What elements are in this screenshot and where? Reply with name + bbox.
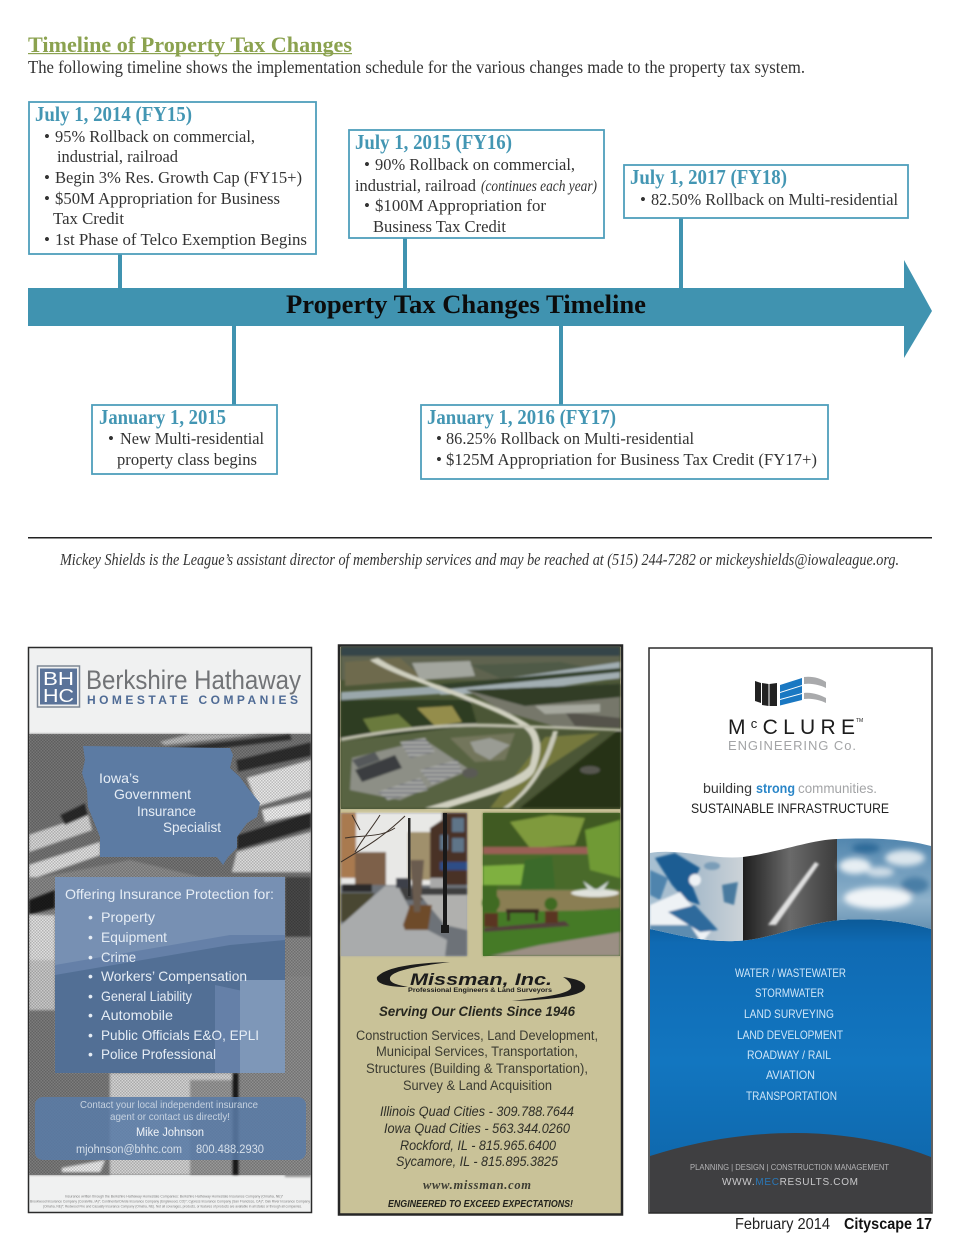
list: January 2016 changes: 86.25% Rollback on Multi-residential [446, 429, 694, 448]
coverage panel: Workers’ Compensation [101, 968, 247, 984]
coverage panel: • [88, 909, 93, 925]
service list: STORMWATER [755, 986, 824, 1000]
tagline: Specialist [163, 819, 221, 835]
office phone numbers [380, 1104, 574, 1169]
logo: Missman [377, 962, 585, 1001]
logo: Missman: Missman, Inc. [410, 971, 552, 989]
coverage panel: • [88, 949, 93, 965]
tagline [703, 780, 877, 796]
list: January 2015 changes: New Multi-residential [120, 429, 264, 448]
contact panel: Mike Johnson [136, 1127, 204, 1139]
list: July 2015 changes: • [364, 155, 370, 174]
service list: LAND SURVEYING [744, 1007, 834, 1021]
page footer [735, 1216, 932, 1233]
title: Timeline of Property Tax Changes [28, 32, 352, 57]
coverage panel: • [88, 988, 93, 1004]
list: July 2015 changes: industrial, railroad [355, 176, 476, 195]
company subtitle: HOMESTATE COMPANIES [87, 693, 298, 707]
list: July 2014 changes [44, 127, 307, 249]
service list: LAND DEVELOPMENT [737, 1028, 844, 1042]
list: January 2016 changes: • [436, 429, 442, 448]
tagline: communities. [798, 780, 877, 796]
slogan: Serving Our Clients Since 1946 [379, 1003, 575, 1019]
photo: downtown streetscape [341, 813, 467, 956]
service list: AVIATION [766, 1068, 815, 1082]
services: Structures (Building & Transportation), [366, 1061, 588, 1076]
photo: park with fountain [482, 813, 620, 956]
list: January 2016 changes: $125M Appropriation for Business Tax Credit (FY17+) [446, 450, 817, 469]
service list [735, 966, 846, 1103]
logo: BH HC: BH [43, 669, 74, 689]
list: July 2015 changes: 90% Rollback on commercial, [375, 155, 575, 174]
list: July 2014 changes: Begin 3% Res. Growth Cap (FY15+) [55, 168, 302, 187]
arrow label: Property Tax Changes Timeline [286, 290, 646, 319]
service list: TRANSPORTATION [746, 1089, 837, 1103]
tagline: Iowa’s [99, 770, 139, 786]
contact panel: mjohnson@bhhc.com [76, 1144, 182, 1156]
panel: January 1, 2016 [421, 405, 828, 479]
legal small print [30, 1194, 310, 1208]
coverage panel: General Liability [101, 988, 192, 1004]
heading: July 2014: July 1, 2014 (FY15) [35, 102, 192, 126]
panel: January 1, 2015 [92, 405, 277, 474]
ad: Missman, Inc. [339, 646, 622, 1214]
office phone numbers: Illinois Quad Cities - 309.788.7644 [380, 1104, 574, 1119]
coverage panel: • [88, 929, 93, 945]
list: January 2015 changes: • [108, 429, 114, 448]
service list: WATER / WASTEWATER [735, 966, 846, 980]
coverage panel: • [88, 1007, 93, 1023]
logo: Missman: Professional Engineers & Land Surveyors [408, 987, 552, 994]
services [356, 1028, 598, 1093]
coverage panel: Automobile [101, 1007, 173, 1023]
list: July 2015 changes: • [364, 196, 370, 215]
tagline: building [703, 780, 752, 796]
services: Construction Services, Land Development, [356, 1028, 598, 1043]
coverage panel: • [88, 1046, 93, 1062]
list: July 2014 changes: 1st Phase of Telco Exemption Begins [55, 230, 307, 249]
photo: aerial highway interchange [341, 647, 621, 809]
halftone photograph [29, 734, 311, 1177]
Iowa map shape [82, 746, 260, 865]
list: July 2015 changes: Business Tax Credit [373, 217, 506, 236]
page footer: Cityscape 17 [844, 1216, 932, 1233]
services: Municipal Services, Transportation, [376, 1044, 578, 1059]
page footer: February 2014 [735, 1216, 830, 1233]
tagline: strong [756, 780, 795, 796]
trademark: TM [856, 718, 863, 724]
tagline [99, 770, 221, 835]
coverage panel: Public Officials E&O, EPLI [101, 1027, 259, 1043]
heading: January 2015: January 1, 2015 [99, 405, 226, 429]
list: July 2014 changes: industrial, railroad [57, 147, 178, 166]
office phone numbers: Sycamore, IL - 815.895.3825 [396, 1154, 558, 1169]
list: July 2014 changes: Tax Credit [53, 209, 124, 228]
heading: July 2015: July 1, 2015 (FY16) [355, 130, 512, 154]
contact panel: Contact your local independent insurance [80, 1099, 258, 1111]
tagline: Government [114, 786, 191, 802]
logo: BH HC: HC [43, 686, 74, 706]
heading: July 2017: July 1, 2017 (FY18) [630, 165, 787, 189]
coverage panel [55, 877, 285, 1073]
logo mark [755, 677, 826, 706]
coverage panel: Offering Insurance Protection for: [65, 886, 274, 902]
list: July 2014 changes: • [44, 168, 50, 187]
intro text: The following timeline shows the implementation schedule for the various changes made to the property tax system. [28, 57, 805, 77]
connector lines [118, 218, 683, 405]
list: July 2014 changes: $50M Appropriation for Business [55, 189, 280, 208]
blue background [650, 919, 931, 1157]
list: January 2016 changes [436, 429, 817, 469]
ad: Berkshire Hathaway [28, 648, 312, 1212]
company name: CLURE [763, 716, 855, 739]
list: July 2015 changes [355, 155, 597, 236]
sustainable infrastructure: SUSTAINABLE INFRASTRUCTURE [691, 800, 889, 816]
company name: Berkshire Hathaway [86, 665, 301, 695]
list: July 2014 changes: • [44, 127, 50, 146]
office phone numbers: Iowa Quad Cities - 563.344.0260 [384, 1121, 570, 1136]
tagline: Insurance [137, 803, 196, 819]
panel: July 1, 2017 [624, 165, 908, 218]
list: January 2016 changes: • [436, 450, 442, 469]
timeline arrow [28, 260, 932, 358]
coverage panel: Crime [101, 949, 136, 965]
company subtitle: ENGINEERING Co. [728, 738, 856, 753]
panel: July 1, 2015 [349, 130, 604, 238]
ad: McClure Engineering [649, 648, 932, 1213]
list: July 2014 changes: • [44, 230, 50, 249]
heading: January 2016: January 1, 2016 (FY17) [427, 405, 616, 429]
legal small print: (Omaha, NE)*; Redwood Fire and Casualty Insurance Company (Omaha, NE). Not all coverages, products, or features of products are available in all states or through all companies. [43, 1204, 302, 1208]
list: July 2014 changes: • [44, 189, 50, 208]
legal small print: Brookwood Insurance Company (Coralville, IA)*; Continental Divide Insurance Company (Englewood, CO)*; Cypress Insurance Company (San Francisco, CA)*; Oak River Insurance Company [30, 1200, 310, 1204]
coverage panel: • [88, 1027, 93, 1043]
list: January 2015 changes [108, 429, 264, 469]
dark footer curve [650, 1133, 931, 1213]
legal small print: Insurance written through the Berkshire Hathaway Homestate Companies: Berkshire Hathaway Homestate Insurance Company (Omaha, NE)* [65, 1194, 284, 1198]
image band: water, road, sky [650, 835, 931, 945]
coverage panel: • [88, 968, 93, 984]
logo: BH HC [38, 666, 80, 707]
list: July 2017 changes: • [640, 190, 646, 209]
coverage panel: Police Professional [101, 1046, 216, 1062]
contact panel: agent or contact us directly! [110, 1111, 230, 1123]
list: July 2017 changes: 82.50% Rollback on Multi-residential [651, 190, 898, 209]
closing slogan: ENGINEERED TO EXCEED EXPECTATIONS! [388, 1199, 574, 1210]
company name: M [728, 716, 746, 739]
list: July 2015 changes: (continues each year) [481, 178, 597, 195]
contact panel [35, 1097, 306, 1160]
list: July 2014 changes: 95% Rollback on commercial, [55, 127, 255, 146]
list: January 2015 changes: property class begins [117, 450, 257, 469]
coverage panel: Property [101, 909, 155, 925]
services: Survey & Land Acquisition [403, 1078, 552, 1093]
footer services: PLANNING | DESIGN | CONSTRUCTION MANAGEMENT [690, 1163, 889, 1172]
coverage panel: Equipment [101, 929, 167, 945]
list: July 2015 changes: $100M Appropriation for [375, 196, 546, 215]
service list: ROADWAY / RAIL [747, 1048, 831, 1062]
company name: c [751, 716, 758, 731]
contact panel: 800.488.2930 [196, 1144, 264, 1156]
website: WWW.MECRESULTS.COM [722, 1177, 858, 1188]
website: www.missman.com [423, 1178, 531, 1192]
office phone numbers: Rockford, IL - 815.965.6400 [400, 1138, 556, 1153]
panel: July 1, 2014 [29, 102, 316, 254]
